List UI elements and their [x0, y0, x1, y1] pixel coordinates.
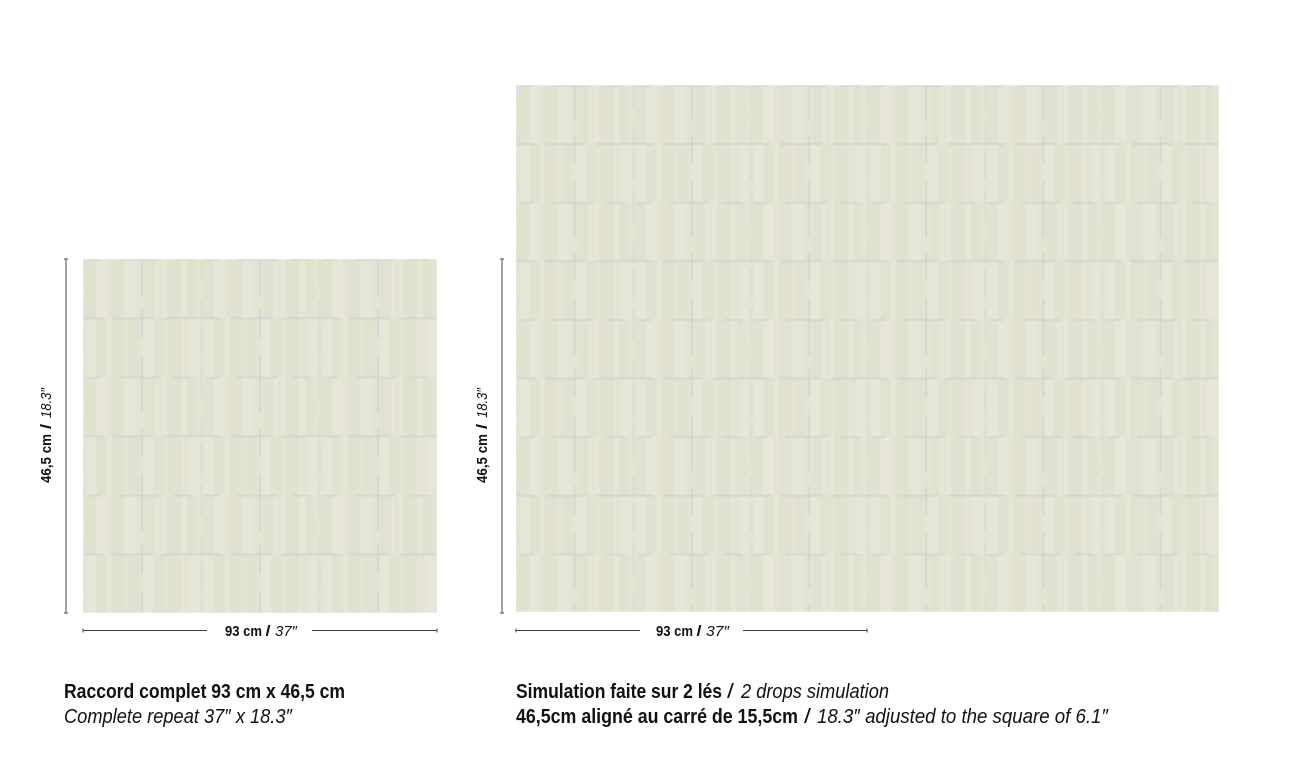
right width dimension line [516, 628, 867, 632]
right height label [474, 387, 491, 483]
left height label: 18.3″ [38, 387, 55, 418]
left caption [64, 680, 345, 728]
right caption: Simulation faite sur 2 lés [516, 680, 722, 703]
left height dimension line [64, 259, 68, 613]
left caption: Raccord complet 93 cm x 46,5 cm [64, 680, 345, 703]
right caption: 46,5cm aligné au carré de 15,5cm [516, 705, 798, 728]
left width label: / [266, 623, 271, 640]
right width label: / [696, 623, 702, 640]
left height label: / [38, 423, 55, 429]
left caption: Complete repeat 37″ x 18.3″ [64, 705, 293, 728]
right caption: 2 drops simulation [740, 680, 889, 703]
left width label [225, 623, 298, 640]
right width label: 93 cm [656, 623, 693, 640]
right caption: 18.3″ adjusted to the square of 6.1″ [817, 705, 1109, 728]
left height label: 46,5 cm [38, 434, 55, 483]
pattern swatch: complete repeat [83, 259, 437, 613]
right caption: / [804, 705, 811, 728]
right height label: 18.3″ [474, 387, 491, 418]
right caption: / [727, 680, 734, 703]
right caption [516, 680, 1109, 728]
left width label: 37″ [275, 623, 298, 640]
right height label: / [474, 423, 491, 429]
right width label: 37″ [706, 623, 730, 640]
left width label: 93 cm [225, 623, 262, 640]
left width dimension line [83, 628, 437, 632]
pattern swatch: 2 drops simulation [516, 85, 1219, 612]
right height dimension line [500, 259, 504, 613]
right width label [656, 623, 730, 640]
right height label: 46,5 cm [474, 434, 491, 483]
left height label [38, 387, 55, 483]
